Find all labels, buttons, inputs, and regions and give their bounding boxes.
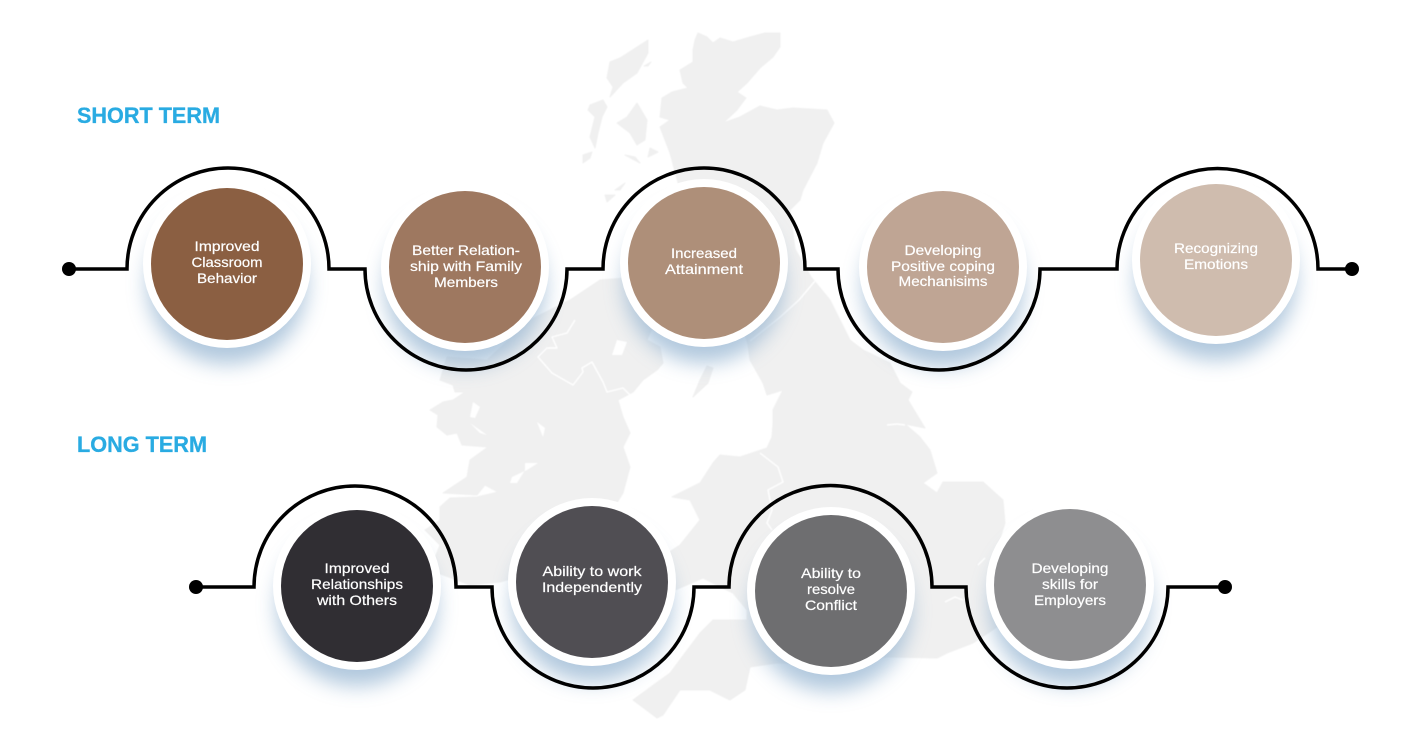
node: Ability to resolve Conflict: [747, 507, 915, 675]
node: Improved Relationships with Others: Relationships: [311, 576, 403, 592]
node: Better Relationship with Family Members: ship with Family: [410, 258, 522, 274]
node: Better Relationship with Family Members: Members: [434, 274, 498, 290]
node: Improved Relationships with Others: Improved: [324, 560, 390, 576]
node: Developing skills for Employers: Developing: [1032, 560, 1108, 576]
node: Ability to resolve Conflict: Conflict: [805, 597, 857, 613]
node: Developing Positive coping Mechanisims: [859, 183, 1027, 351]
background map of UK and Ireland: [425, 33, 1010, 718]
node: Increased Attainment: Attainment: [665, 261, 743, 277]
short term connector line: [62, 168, 1359, 370]
node: Increased Attainment: [620, 179, 788, 347]
node: Ability to work Independently: Ability to work: [542, 563, 643, 579]
section heading: short term: SHORT TERM: [77, 103, 220, 128]
node: Improved Classroom Behavior: Classroom: [192, 254, 262, 270]
node: Developing skills for Employers: skills for: [1042, 576, 1098, 592]
long term connector line: [189, 486, 1232, 688]
node: Better Relationship with Family Members: [381, 183, 549, 351]
node: Increased Attainment: Increased: [671, 245, 737, 261]
node: Ability to work Independently: Independently: [542, 579, 642, 595]
node: Improved Classroom Behavior: Improved: [194, 238, 260, 254]
node: Developing Positive coping Mechanisims: Positive coping: [891, 258, 995, 274]
node: Improved Relationships with Others: with Others: [316, 592, 397, 608]
node: Improved Relationships with Others: [273, 502, 441, 670]
node: Ability to resolve Conflict: resolve: [807, 581, 855, 597]
node: Ability to work Independently: [508, 498, 676, 666]
node: Developing skills for Employers: Employers: [1034, 592, 1106, 608]
node: Recognizing Emotions: [1132, 176, 1300, 344]
node: Improved Classroom Behavior: [143, 180, 311, 348]
node: Recognizing Emotions: Recognizing: [1174, 240, 1258, 256]
node: Developing Positive coping Mechanisims: Mechanisims: [898, 273, 988, 289]
node: Better Relationship with Family Members: Better Relation-: [412, 242, 520, 258]
node: Developing skills for Employers: [986, 501, 1154, 669]
section heading: long term: LONG TERM: [77, 432, 207, 457]
node: Ability to resolve Conflict: Ability to: [801, 565, 861, 581]
node: Recognizing Emotions: Emotions: [1184, 256, 1248, 272]
circle drop shadows: [147, 200, 1296, 691]
node: Developing Positive coping Mechanisims: Developing: [904, 242, 982, 258]
node: Improved Classroom Behavior: Behavior: [197, 270, 257, 286]
